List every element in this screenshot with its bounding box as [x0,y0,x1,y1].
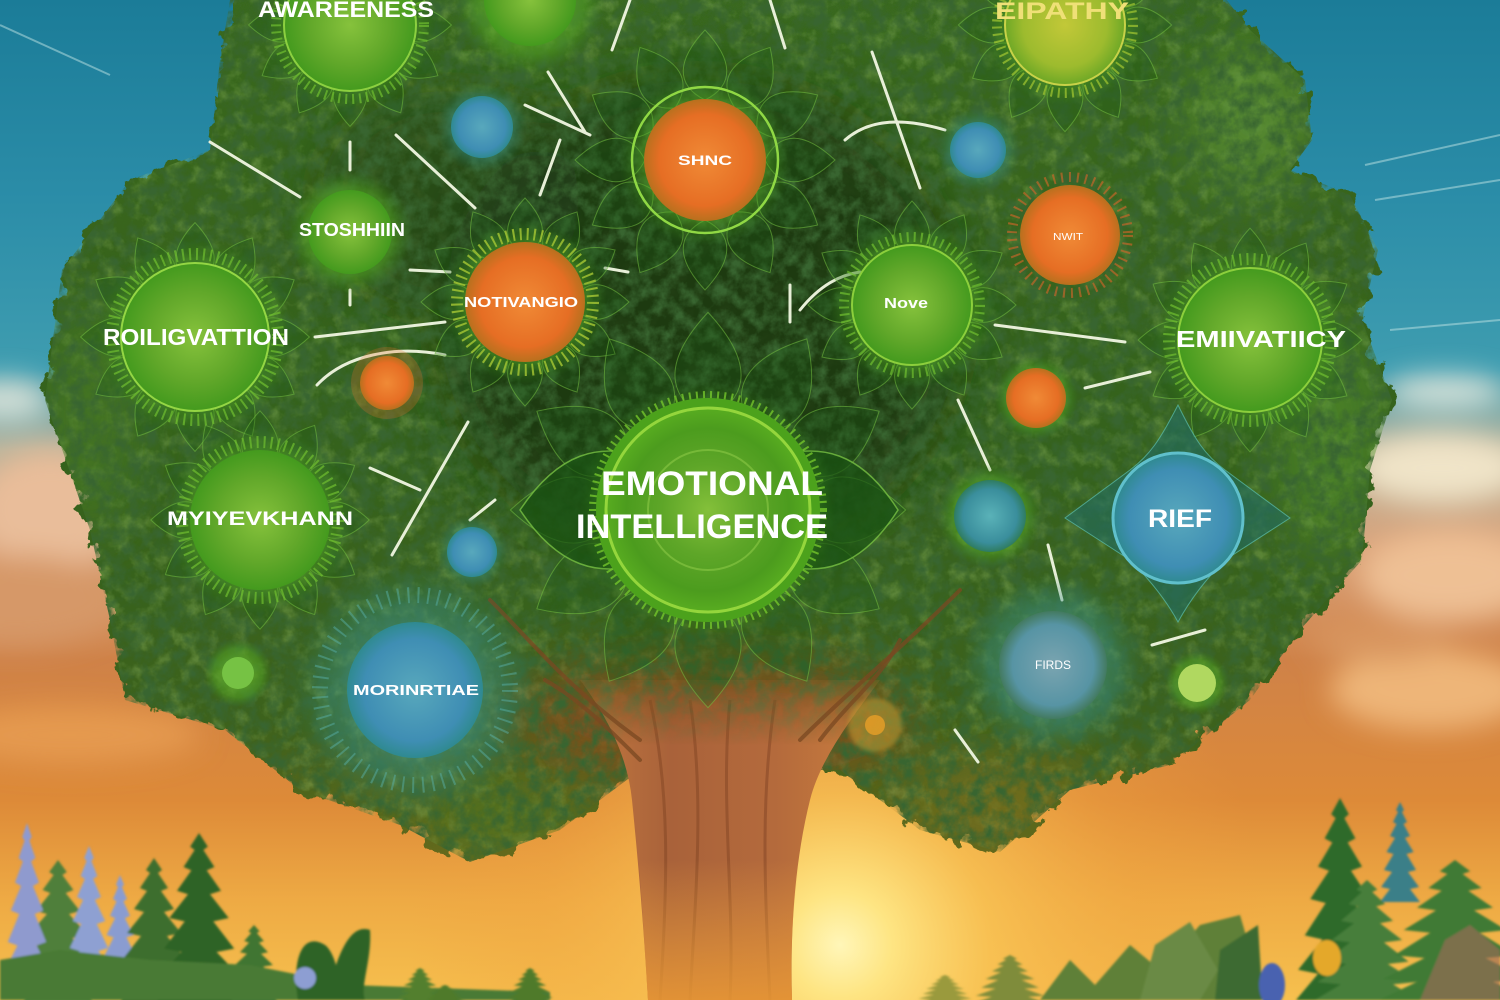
node: emotional intelligence [510,312,906,708]
label: shinc: SHNC [678,152,732,168]
label: firds: FIRDS [1035,658,1071,672]
label: roiligvattion: ROILIGVATTION [103,324,289,350]
node: small green left [204,639,272,707]
node: small teal lower left [436,516,508,588]
node: roiligvattion [81,223,309,451]
heading: emotional intelligence [576,465,828,546]
node: myiyevkhann [151,411,369,629]
node: notivangio orange [421,198,629,406]
tree trunk [490,590,960,1000]
node: small lime right [1165,651,1229,715]
node: small amber [848,698,902,752]
label: orange upper right: NWIT [1053,232,1083,243]
node: small teal right [936,108,1020,192]
foreground plants right [917,798,1500,1000]
node: small orange left [351,347,423,419]
label: stoshhiin: STOSHHIIN [299,220,405,240]
node: small orange right [994,356,1078,440]
label: morinrtiae: MORINRTIAE [353,682,479,699]
foreground plants left [0,823,554,1000]
label: notivangio: NOTIVANGIO [464,294,578,311]
node: nove [808,201,1016,409]
node: small teal left [436,81,528,173]
heading: emotional intelligence: INTELLIGENCE [576,508,828,546]
node: empathy [958,0,1172,132]
tree canopy [39,0,1397,862]
label: nove: Nove [884,295,928,312]
label: emiivatiicy: EMIIVATIICY [1176,326,1346,352]
node: stoshhiin [288,170,412,294]
node: rief [1065,405,1290,622]
node: teal centre right [938,464,1042,568]
node: top centre green [455,0,605,75]
label: myiyevkhann: MYIYEVKHANN [167,509,353,530]
node: firds [961,573,1145,757]
heading: emotional intelligence: EMOTIONAL [601,465,823,503]
node: shinc orange [575,30,835,290]
connector lines [210,0,1205,762]
node: morinrtiae [290,565,540,815]
node: emiivatiicy [1138,228,1362,452]
node: orange upper right [1012,177,1128,293]
label: rief: RIEF [1148,505,1212,533]
node: awareness [249,0,451,126]
